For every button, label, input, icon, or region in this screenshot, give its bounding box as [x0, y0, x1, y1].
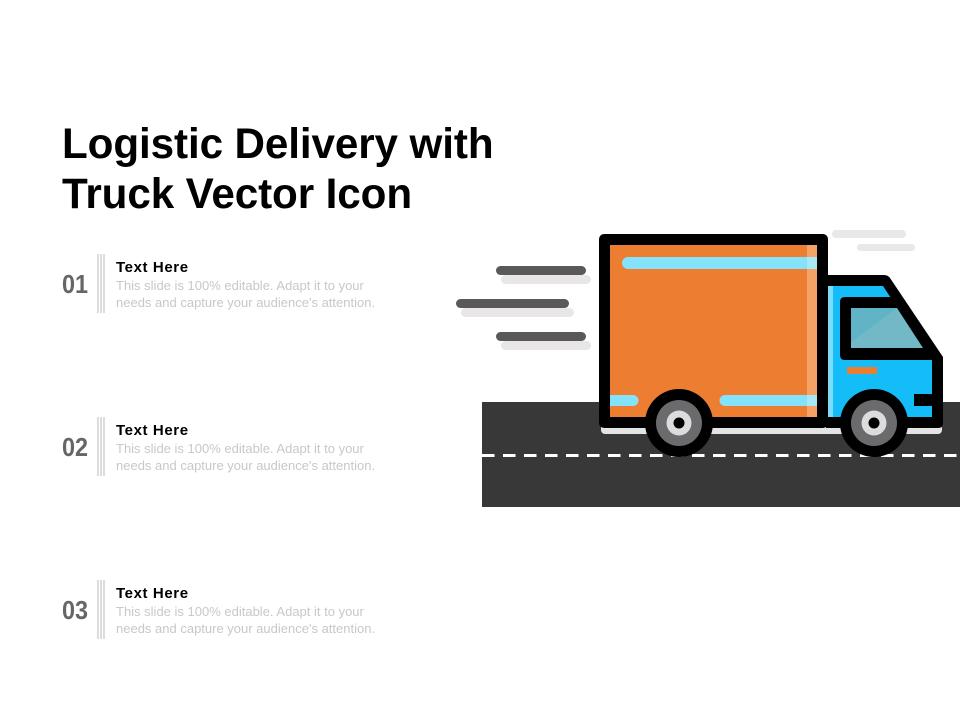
front wheel: [840, 389, 908, 457]
title: [62, 120, 494, 217]
speed lines: [456, 230, 915, 350]
list item 02: [62, 417, 375, 476]
description 01: needs and capture your audience's attention.: [116, 294, 375, 310]
description 01: This slide is 100% editable. Adapt it to your: [116, 278, 364, 293]
description 01: [116, 278, 375, 310]
cab: [826, 275, 943, 428]
road: [482, 402, 960, 507]
door handle: [847, 367, 877, 374]
rear wheel: [645, 389, 713, 457]
description 02: This slide is 100% editable. Adapt it to your: [116, 441, 364, 456]
icon: delivery truck: [599, 234, 943, 457]
heading 02: Text Here: [116, 422, 189, 438]
description 03: needs and capture your audience's attention.: [116, 620, 375, 636]
title: Truck Vector Icon: [62, 170, 412, 217]
description 03: This slide is 100% editable. Adapt it to your: [116, 604, 364, 619]
description 03: [116, 604, 375, 636]
bumper: [914, 394, 934, 406]
truck shadow: [601, 424, 942, 434]
number 02: 02: [62, 432, 88, 462]
cab window: [840, 297, 934, 360]
list item 01: [62, 254, 375, 313]
number 01: 01: [62, 269, 88, 299]
heading 03: Text Here: [116, 584, 189, 602]
heading 01: Text Here: [116, 258, 189, 276]
list item 03: [62, 580, 375, 639]
description 02: [116, 441, 375, 472]
description 02: needs and capture your audience's attention.: [116, 458, 375, 472]
title: Logistic Delivery with: [62, 120, 494, 167]
cargo box: [599, 234, 828, 428]
number 03: 03: [62, 595, 88, 625]
